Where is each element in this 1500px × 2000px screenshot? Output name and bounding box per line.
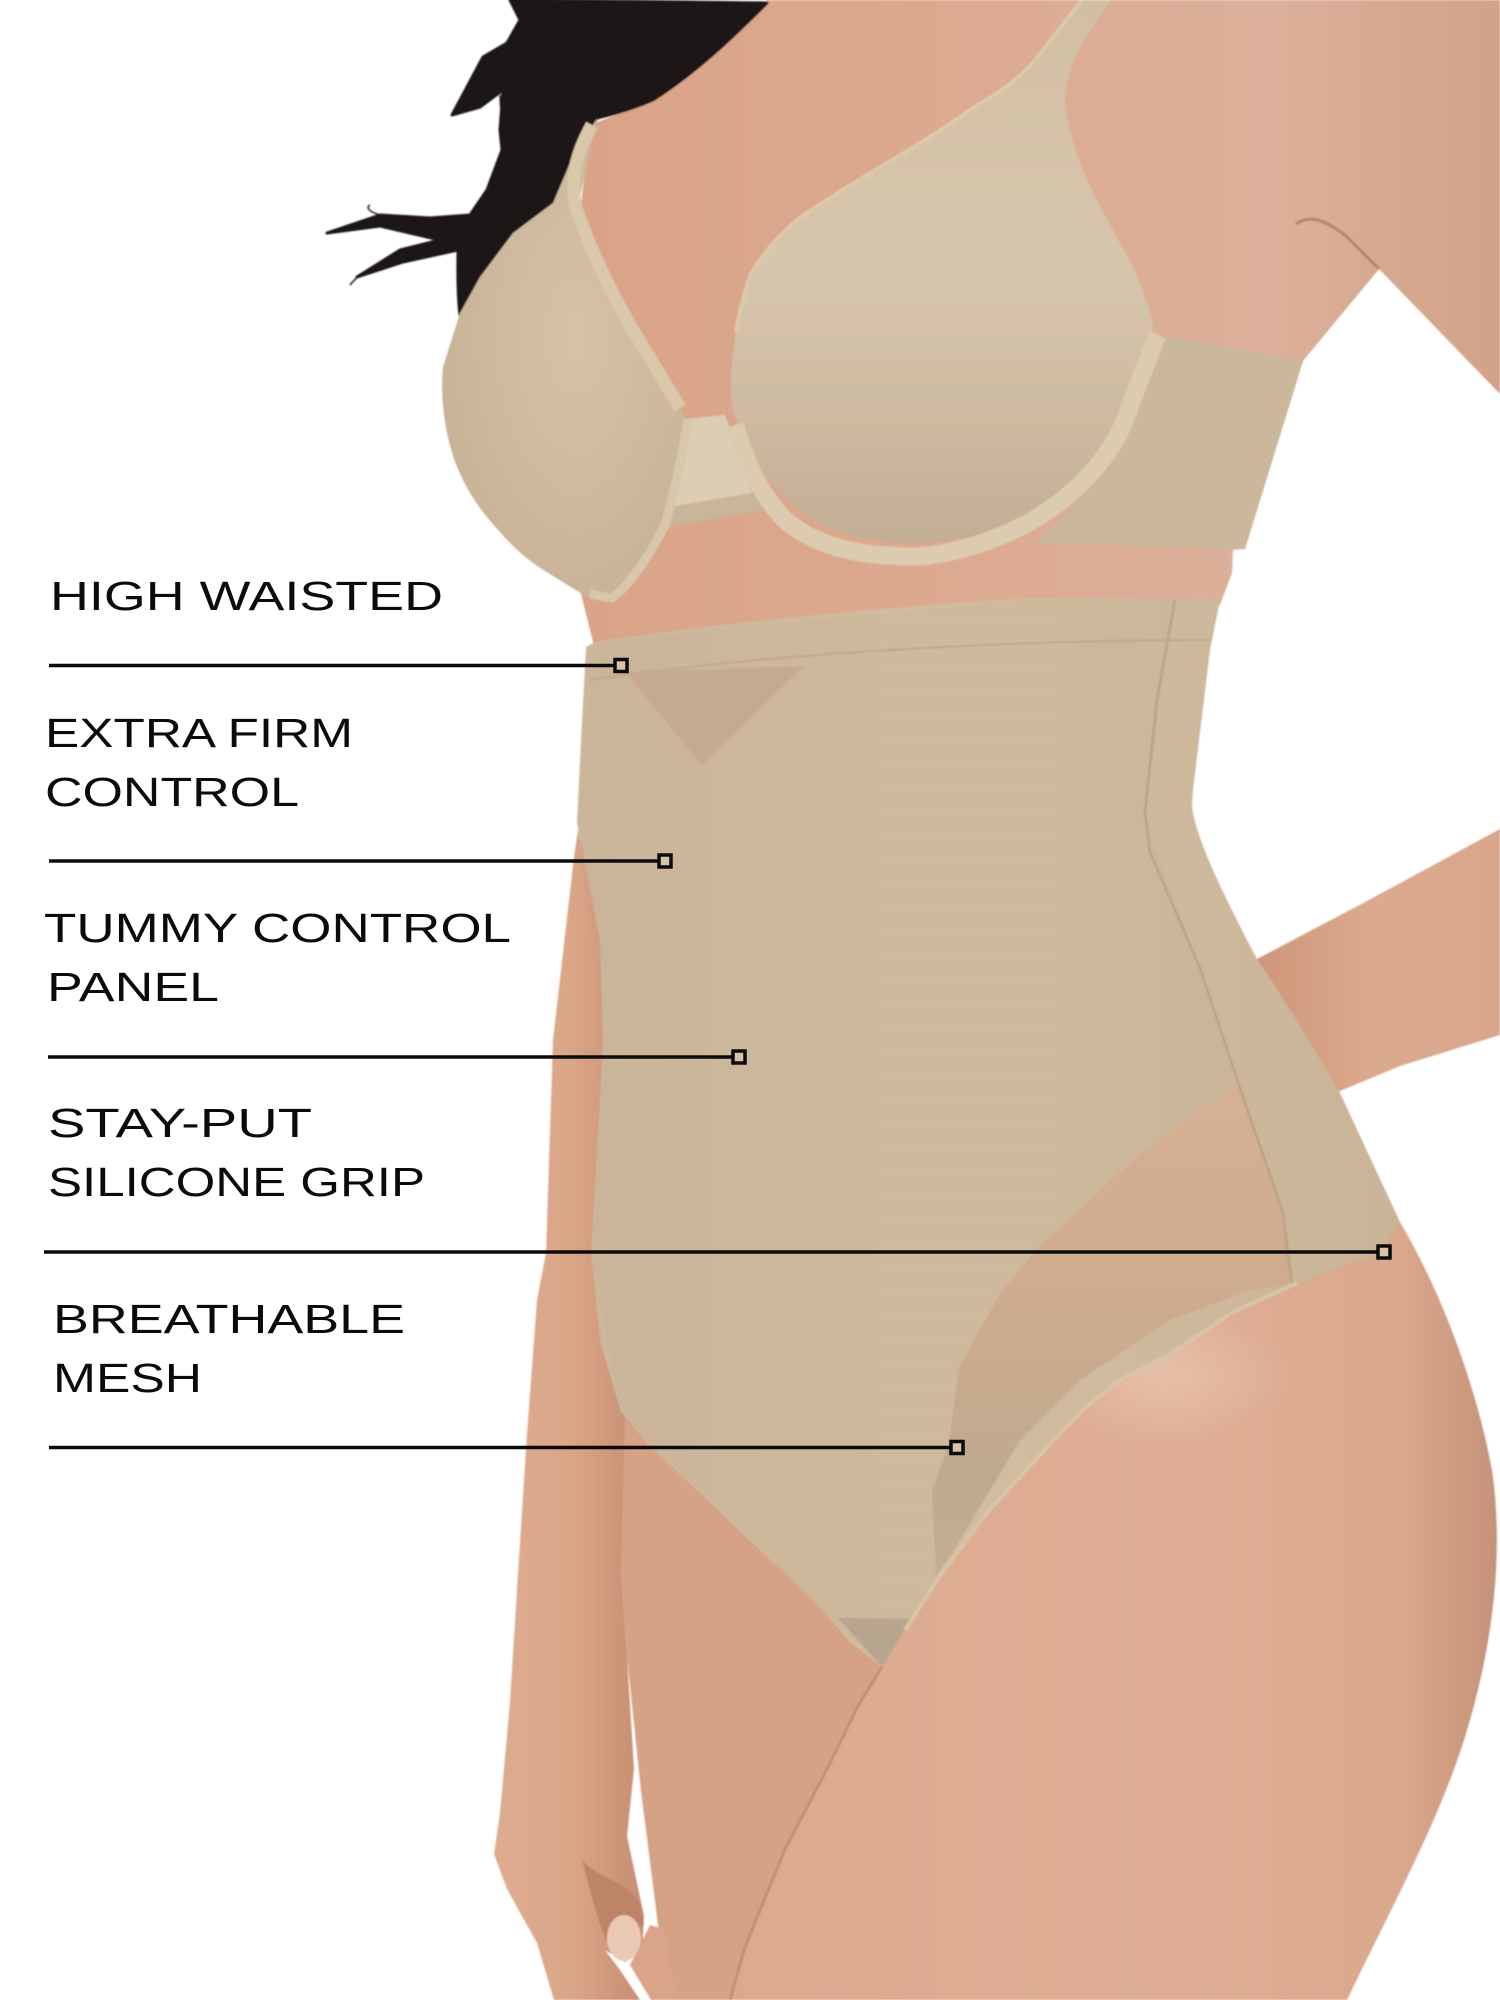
- label: MESH: [53, 1355, 202, 1401]
- bra left cup underwire trim: [590, 420, 688, 598]
- upper body skin: [570, 0, 1500, 650]
- near leg: [730, 1222, 1497, 2000]
- bra gore: [675, 415, 752, 506]
- mesh front triangle: [625, 666, 804, 765]
- bra lower centre band: [667, 493, 764, 527]
- callout: breathable mesh: [49, 1296, 963, 1454]
- stray strands: [350, 95, 503, 285]
- marker: [659, 855, 671, 867]
- callout: tummy control panel: [44, 905, 745, 1063]
- crotch gusset: [838, 1618, 912, 1667]
- leader line: [44, 1250, 1378, 1254]
- marker: [1378, 1246, 1390, 1258]
- waistband stitching: [590, 640, 1212, 680]
- bra left cup: [442, 118, 686, 601]
- bra left cup neckline trim: [574, 125, 680, 408]
- model figure photo illustration: [327, 0, 1500, 2000]
- mesh side panel: [932, 1082, 1290, 1577]
- label: BREATHABLE: [53, 1296, 405, 1342]
- label: SILICONE GRIP: [48, 1159, 425, 1205]
- marker: [951, 1442, 963, 1454]
- label: EXTRA FIRM: [45, 710, 353, 756]
- leader line: [49, 664, 615, 667]
- bra underwire trim: [735, 335, 1158, 556]
- label: CONTROL: [45, 769, 299, 815]
- label: HIGH WAISTED: [50, 573, 443, 619]
- marker: [615, 660, 627, 672]
- armpit crease: [1296, 219, 1379, 269]
- bra right cup neckline edge: [736, 0, 1082, 332]
- leg trim: [905, 1283, 1297, 1630]
- bra band: [1035, 336, 1303, 549]
- label: TUMMY CONTROL: [44, 905, 511, 951]
- leader line: [48, 1055, 733, 1059]
- leader line: [49, 859, 659, 863]
- knit texture: [577, 597, 1238, 1667]
- left arm and hand: [494, 830, 674, 2000]
- high waisted shapewear: [577, 597, 1400, 1667]
- callout: stay-put silicone grip: [44, 1100, 1390, 1258]
- second finger: [630, 1925, 674, 2000]
- hair: [327, 0, 767, 315]
- label: PANEL: [47, 964, 219, 1010]
- callout: high waisted: [49, 573, 627, 672]
- thigh highlight: [1035, 1305, 1295, 1445]
- forearm behind back: [1240, 829, 1500, 1110]
- callout: extra firm control: [45, 710, 671, 867]
- far leg: [621, 1412, 900, 2000]
- finger shading: [582, 1860, 644, 1940]
- leader line: [49, 1446, 951, 1449]
- fingernail: [607, 1915, 641, 1961]
- thigh crease: [730, 1667, 882, 2000]
- label: STAY-PUT: [48, 1100, 312, 1146]
- side seam: [1145, 600, 1292, 1285]
- bra right cup and strap: [731, 0, 1153, 543]
- marker: [733, 1051, 745, 1063]
